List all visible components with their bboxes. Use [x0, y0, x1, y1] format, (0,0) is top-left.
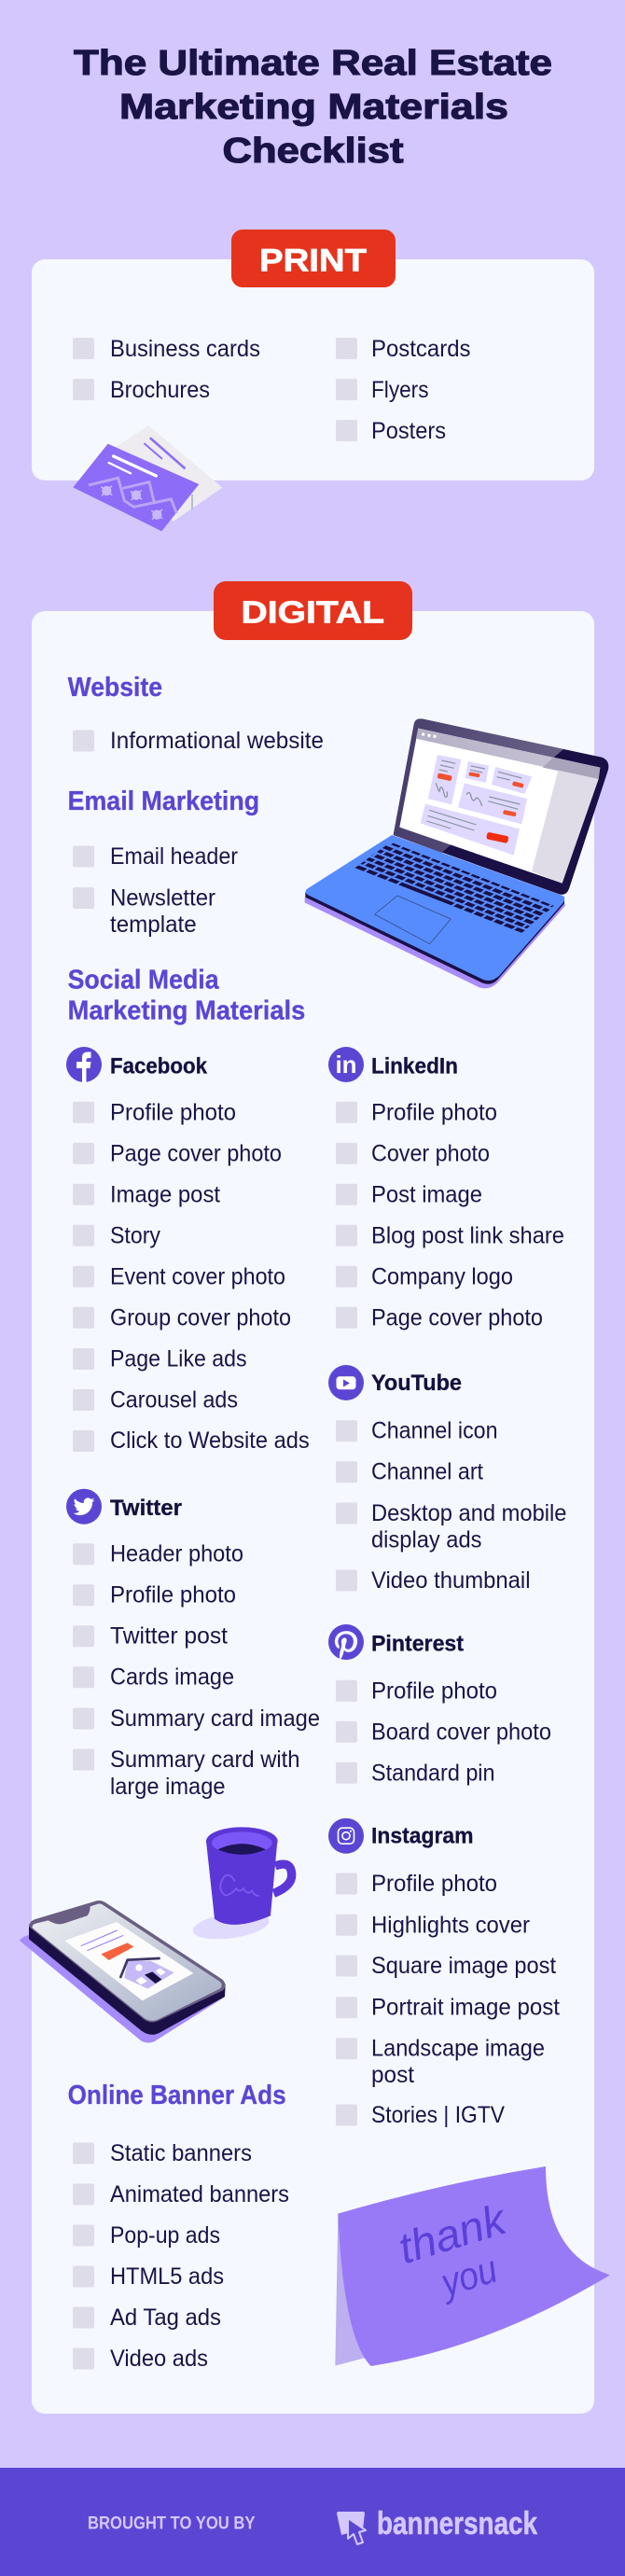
- icon: linkedin: in: [335, 1051, 357, 1079]
- item: summary card with large image: [73, 1747, 300, 1800]
- list: instagram: [328, 1818, 560, 2128]
- list: youtube: [328, 1365, 567, 1594]
- heading: online banner ads: Online Banner Ads: [68, 2081, 286, 2110]
- title: Checklist: [222, 132, 404, 171]
- item: profile photo: Profile photo: [371, 1871, 497, 1897]
- icon: sticky note: [335, 2166, 610, 2366]
- badge: digital: DIGITAL: [241, 594, 384, 629]
- text: brought to you by: BROUGHT TO YOU BY: [88, 2514, 256, 2534]
- item: square image post: Square image post: [371, 1953, 556, 1979]
- item: desktop and mobile display ads: [336, 1500, 567, 1553]
- icon: bannersnack logo: [337, 2512, 366, 2544]
- heading: website: Website: [68, 673, 162, 703]
- list: pinterest: [328, 1624, 551, 1786]
- item: video ads: Video ads: [110, 2346, 208, 2372]
- heading: social media marketing materials: [68, 965, 305, 1026]
- icon: laptop: [305, 718, 608, 988]
- item: brochures: Brochures: [110, 377, 210, 403]
- title: The Ultimate Real Estate: [74, 44, 552, 83]
- item: email header: Email header: [110, 843, 238, 870]
- item: image post: Image post: [110, 1181, 220, 1207]
- item: newsletter template: template: [110, 912, 197, 938]
- item: video thumbnail: Video thumbnail: [371, 1567, 530, 1594]
- badge: print: PRINT: [259, 244, 367, 279]
- item: posters: Posters: [371, 418, 446, 444]
- item: landscape image post: Landscape image: [371, 2036, 545, 2062]
- item: brochures: [73, 377, 210, 403]
- item: business cards: Business cards: [110, 336, 260, 362]
- item: page like ads: Page Like ads: [110, 1345, 247, 1372]
- item: twitter post: Twitter post: [110, 1623, 228, 1650]
- item: summary card with large image: Summary card with: [110, 1747, 300, 1773]
- icon: pinterest: [328, 1624, 364, 1660]
- text: thank you: thank: [393, 2194, 513, 2273]
- item: group cover photo: Group cover photo: [110, 1304, 291, 1330]
- item: blog post link share: Blog post link share: [371, 1222, 564, 1248]
- heading: social media marketing materials: Marketing Materials: [68, 996, 305, 1026]
- item: channel art: Channel art: [371, 1459, 483, 1485]
- label: instagram: Instagram: [371, 1824, 474, 1849]
- item: cover photo: Cover photo: [371, 1140, 490, 1166]
- item: landscape image post: post: [371, 2062, 414, 2088]
- item: informational website: Informational website: [110, 728, 324, 754]
- item: standard pin: Standard pin: [371, 1760, 494, 1786]
- item: click to website ads: Click to Website ads: [110, 1427, 310, 1454]
- list: facebook: [66, 1047, 310, 1454]
- label: twitter: Twitter: [110, 1496, 182, 1521]
- item: event cover photo: Event cover photo: [110, 1263, 285, 1289]
- label: facebook: Facebook: [110, 1054, 207, 1079]
- text: thank you: [393, 2194, 513, 2305]
- label: youtube: YouTube: [371, 1371, 462, 1396]
- heading: social media marketing materials: Social Media: [68, 965, 219, 995]
- badge: digital: [214, 581, 412, 640]
- footer: [0, 2468, 625, 2576]
- item: pop-up ads: Pop-up ads: [110, 2222, 220, 2249]
- item: flyers: [336, 377, 429, 403]
- panel: print: [32, 230, 594, 480]
- item: newsletter template: [73, 885, 215, 938]
- item: video ads: [73, 2346, 208, 2372]
- item: board cover photo: Board cover photo: [371, 1719, 551, 1745]
- item: company logo: Company logo: [371, 1263, 513, 1289]
- icon: twitter: [66, 1489, 102, 1525]
- item: profile photo: Profile photo: [110, 1582, 236, 1608]
- item: profile photo: Profile photo: [371, 1678, 497, 1704]
- list: online banner ads: [73, 2140, 289, 2372]
- item: page cover photo: Page cover photo: [371, 1304, 543, 1330]
- text: bannersnack: bannersnack: [377, 2506, 537, 2541]
- item: portrait image post: Portrait image post: [371, 1995, 560, 2021]
- item: static banners: Static banners: [110, 2140, 252, 2166]
- item: header photo: Header photo: [110, 1541, 243, 1567]
- item: page cover photo: Page cover photo: [110, 1140, 282, 1166]
- list: twitter: [66, 1489, 320, 1800]
- icon: instagram: [328, 1818, 364, 1854]
- title: Marketing Materials: [119, 88, 508, 127]
- title: [74, 44, 552, 171]
- icon: coffee mug and phone: [20, 1827, 292, 2042]
- badge: print: [231, 230, 396, 287]
- item: story: Story: [110, 1222, 160, 1248]
- icon: youtube: [328, 1365, 364, 1400]
- icon: facebook: [66, 1047, 102, 1082]
- item: story: [73, 1222, 160, 1248]
- item: landscape image post: [336, 2036, 545, 2088]
- heading: email marketing: Email Marketing: [68, 787, 259, 816]
- item: summary card with large image: large image: [110, 1774, 226, 1800]
- panel: digital: [32, 581, 594, 2414]
- label: pinterest: Pinterest: [371, 1631, 464, 1656]
- label: linkedin: LinkedIn: [371, 1054, 458, 1079]
- item: postcards: Postcards: [371, 336, 470, 362]
- item: carousel ads: Carousel ads: [110, 1386, 238, 1413]
- item: profile photo: Profile photo: [371, 1099, 497, 1125]
- item: post image: Post image: [371, 1181, 482, 1207]
- list: linkedin: [328, 1047, 564, 1330]
- item: newsletter template: Newsletter: [110, 885, 215, 912]
- item: html5 ads: HTML5 ads: [110, 2263, 224, 2290]
- icon: linkedin: [328, 1047, 364, 1082]
- item: highlights cover: Highlights cover: [371, 1912, 530, 1938]
- item: animated banners: Animated banners: [110, 2181, 289, 2207]
- item: cards image: Cards image: [110, 1664, 234, 1691]
- text: thank you: you: [434, 2247, 502, 2305]
- item: channel icon: Channel icon: [371, 1418, 498, 1444]
- icon: business cards illustration: [73, 425, 222, 531]
- icon: coffee mug: [191, 1827, 292, 1943]
- icon: phone: [20, 1901, 226, 2042]
- item: posters: [336, 418, 446, 444]
- item: stories igtv: Stories | IGTV: [371, 2102, 505, 2128]
- item: profile photo: Profile photo: [110, 1099, 236, 1125]
- item: summary card image: Summary card image: [110, 1706, 320, 1732]
- item: ad tag ads: Ad Tag ads: [110, 2304, 221, 2331]
- item: desktop and mobile display ads: display ads: [371, 1527, 481, 1553]
- item: desktop and mobile display ads: Desktop and mobile: [371, 1500, 567, 1526]
- item: flyers: Flyers: [371, 377, 429, 403]
